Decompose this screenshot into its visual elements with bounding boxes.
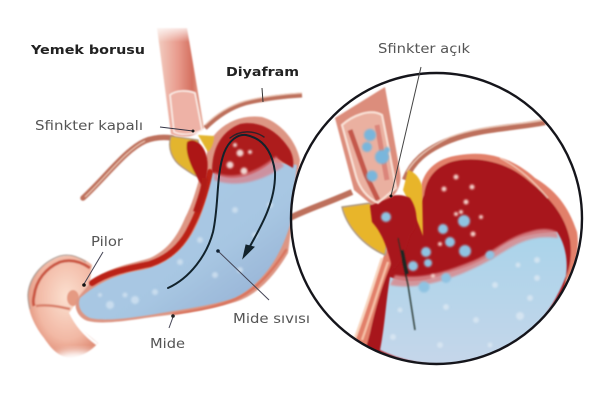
pointer: Mide sıvısı <box>216 249 269 300</box>
curved arrow: stomach motion <box>168 132 275 288</box>
stomach gas region <box>212 123 293 178</box>
pointer: Diyafram <box>262 88 263 102</box>
pointer: Pilor <box>82 252 103 287</box>
diaphragm left <box>83 137 172 198</box>
label: Sfinkter kapalı: Sfinkter kapalı <box>35 119 143 134</box>
open sphincter <box>370 195 416 330</box>
panel: whole stomach <box>28 24 302 369</box>
gastric liquid in circle <box>380 232 567 364</box>
bubbles in liquid <box>98 202 273 309</box>
label: Mide: Mide <box>150 337 185 352</box>
fat tissue <box>342 170 423 255</box>
label: Diyafram: Diyafram <box>226 65 299 79</box>
food bubbles in esophagus <box>362 129 390 182</box>
label: Yemek borusu: Yemek borusu <box>30 43 145 57</box>
stomach body in circle <box>345 154 578 370</box>
red wall along upper curve <box>92 172 286 314</box>
infographic: stomach and sphincter diagram <box>26 28 584 366</box>
duodenum <box>28 255 98 358</box>
pointer: Sfinkter açık <box>390 67 421 198</box>
pink band above liquid <box>390 229 558 286</box>
sphincter closed <box>170 135 214 212</box>
label: Pilor: Pilor <box>91 235 124 250</box>
esophagus <box>157 28 204 136</box>
esophagus in circle <box>335 87 401 205</box>
food bubbles in stomach <box>381 212 494 292</box>
diaphragm right <box>205 93 302 128</box>
label: Mide sıvısı: Mide sıvısı <box>233 312 310 327</box>
panel: magnified circle <box>288 73 582 370</box>
bubbles in gastric liquid <box>390 257 540 348</box>
stomach liquid <box>79 162 297 319</box>
circle outline <box>291 73 582 364</box>
fade at duodenum end <box>52 351 104 369</box>
diaphragm inside circle <box>288 120 545 219</box>
pointer: Sfinkter kapalı <box>160 127 194 132</box>
stomach outer wall <box>76 116 300 322</box>
label: Sfinkter açık: Sfinkter açık <box>378 42 471 57</box>
pointer: Mide <box>169 314 175 328</box>
fade at esophagus top <box>150 24 195 42</box>
